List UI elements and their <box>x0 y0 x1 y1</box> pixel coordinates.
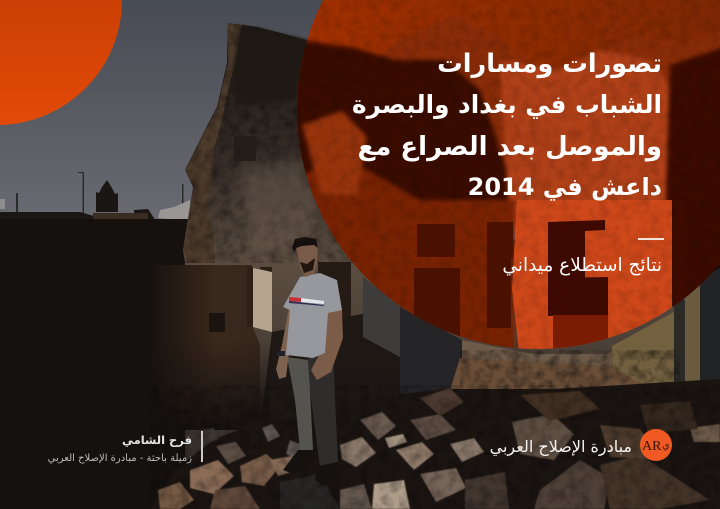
right rubble stones <box>512 391 720 509</box>
dark right side <box>663 46 720 308</box>
logo: ي <box>662 440 670 451</box>
right edge panel <box>685 280 700 395</box>
tinted textured wall upper <box>500 50 680 230</box>
sky <box>0 0 720 240</box>
small wall window <box>234 136 256 161</box>
lower window <box>548 277 608 316</box>
watch <box>277 351 285 356</box>
left arm <box>276 307 295 379</box>
left rubble stones <box>158 424 340 509</box>
left leg <box>287 357 313 450</box>
logo: AR <box>642 439 662 454</box>
subtitle: نتائج استطلاع ميداني <box>502 255 662 276</box>
left windows <box>414 222 513 338</box>
dark wall top <box>232 26 307 106</box>
brick section <box>150 265 260 425</box>
title line 2: الشباب في بغداد والبصرة <box>352 90 662 119</box>
rubble <box>150 379 720 509</box>
dark fade over brick <box>150 340 270 430</box>
title line 4: داعش في 2014 <box>468 173 662 201</box>
shutter grille <box>553 315 608 350</box>
bricks <box>450 358 670 430</box>
right leg <box>308 353 338 467</box>
dark pillar <box>674 300 685 395</box>
distant skyline with tower and antennas <box>0 172 190 222</box>
texture on wall <box>184 23 352 263</box>
neck and face <box>296 245 318 277</box>
lower right wall outside circle <box>363 268 720 430</box>
author role: زميلة باحثة - مبادرة الإصلاح العربي <box>48 453 192 464</box>
pillar <box>675 210 686 305</box>
upper window <box>548 220 605 278</box>
door recess <box>247 267 272 327</box>
rubble stones blurred slightly <box>158 388 720 509</box>
grey wall left of bricks <box>400 307 462 420</box>
title line 1: تصورات ومسارات <box>437 49 662 79</box>
t-shirt <box>283 273 342 358</box>
center rubble stones <box>340 388 509 509</box>
stripe <box>289 297 301 302</box>
organisation name: مبادرة الإصلاح العربي <box>490 437 632 456</box>
tinted sky <box>290 0 720 100</box>
lit wall <box>512 200 672 360</box>
title <box>352 49 662 201</box>
lit door panel <box>253 268 272 332</box>
big orange circle showing tinted building <box>297 0 720 349</box>
dark doorway behind man <box>318 262 351 322</box>
tinted shapes softened <box>297 16 720 348</box>
author name: فرح الشامي <box>122 433 192 447</box>
plaster patch <box>240 160 320 260</box>
top-left orange circle <box>0 0 122 125</box>
ledge shadow under wall <box>250 312 720 509</box>
tinted ruins top <box>380 16 720 168</box>
patch <box>302 111 367 195</box>
rubble texture <box>150 385 720 509</box>
dark foreground at left <box>0 219 230 509</box>
right arm <box>311 310 343 380</box>
logo <box>640 429 672 461</box>
divider rule <box>638 238 664 240</box>
hair <box>292 237 318 253</box>
author divider <box>201 431 202 462</box>
crumbling wall edge <box>184 23 242 263</box>
ruined wall <box>183 23 720 509</box>
brick window <box>209 313 225 332</box>
dark ruin mass <box>297 38 511 203</box>
tinted left wall <box>306 166 517 348</box>
man <box>276 237 343 486</box>
rubble base <box>150 379 720 509</box>
shoes <box>283 450 343 486</box>
title line 3: والموصل بعد الصراع مع <box>357 132 662 162</box>
beard <box>300 258 315 273</box>
texture inside circle <box>297 0 720 360</box>
tan plaster <box>612 312 674 398</box>
